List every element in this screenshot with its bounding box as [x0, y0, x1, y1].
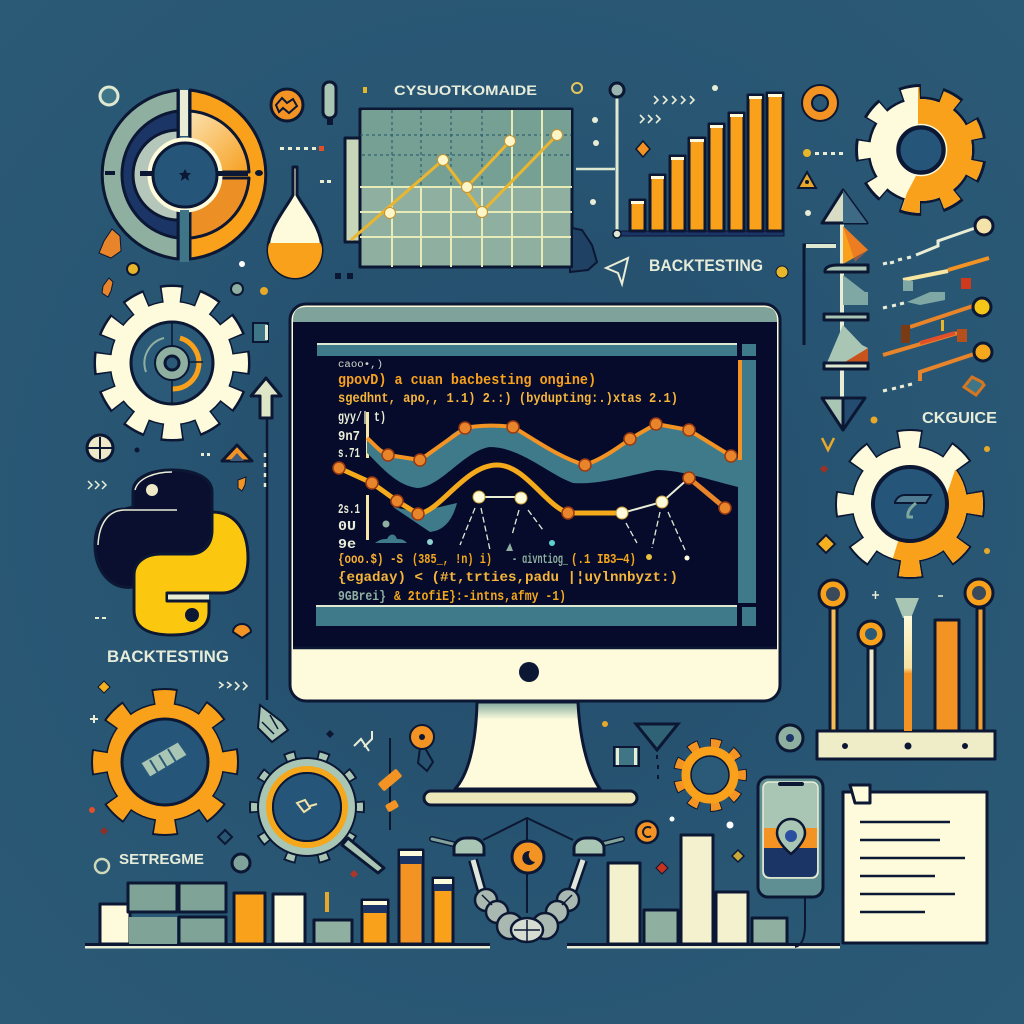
- icon: vertical double arrow: [804, 190, 868, 430]
- chart line: [351, 130, 562, 240]
- python yellow half: [134, 512, 248, 635]
- code text bottom: {ooo.$) -S: [338, 552, 403, 568]
- icon: phone: [758, 777, 823, 947]
- code text bottom: (385_, !n) i): [412, 552, 492, 568]
- power button: [519, 662, 539, 682]
- panel: line chart grid: [345, 109, 572, 267]
- icon: gear right: [846, 440, 974, 568]
- icon: document: [843, 785, 987, 943]
- code text bottom: [338, 552, 678, 605]
- icon: chevron: [222, 445, 252, 461]
- icon: small rectangle: [614, 747, 639, 766]
- icon: small orange cap: [233, 624, 251, 638]
- icon: orange diamond ring: [964, 377, 984, 395]
- small flame icons: [99, 229, 121, 297]
- icon: square outline: [253, 323, 268, 342]
- icon: pliers / clip: [258, 705, 288, 742]
- dots top right: [590, 85, 843, 216]
- small arrows: [640, 96, 694, 123]
- small coin: [776, 266, 788, 278]
- small marks: [95, 448, 246, 619]
- code text bottom: (.1 ІВ3—4): [571, 552, 636, 568]
- code text bottom: {egaday) < (#t,trties,padu |¦uylnnbyzt:): [338, 570, 678, 586]
- icon: pencil marks: [354, 731, 402, 830]
- icon: segmented ring: [102, 90, 266, 262]
- code text bottom: 9GBrei}: [338, 589, 386, 605]
- small arrows: [88, 481, 106, 489]
- icon: orange ring: [807, 90, 833, 116]
- icon: python logo: [95, 470, 248, 635]
- icon: dark puzzle piece: [570, 228, 597, 272]
- icon: liquid drop: [268, 167, 322, 278]
- line chart upper: [367, 418, 737, 471]
- label: ckguice: CKGUICE: [922, 410, 997, 427]
- bar chart: top right: [576, 83, 784, 238]
- small diamond: [817, 446, 990, 554]
- icon: orange pulley: [410, 725, 434, 771]
- bar chart: bottom center: [567, 835, 840, 948]
- connector 1: [883, 217, 993, 264]
- line chart lower: [333, 462, 731, 560]
- area band: [367, 424, 738, 488]
- icon: up arrow with line: [251, 378, 281, 700]
- small marks by title: [363, 83, 582, 93]
- monitor stand: [424, 702, 637, 805]
- small decorations: [98, 681, 247, 693]
- code text bottom: & 2tofiE}:-intns,afmy -1): [394, 589, 566, 605]
- icon: yellow triangle: [798, 172, 816, 188]
- gear orange half: [902, 87, 983, 213]
- icon: orange c coin: [636, 821, 658, 843]
- icon: gear orange lower left: [101, 698, 229, 826]
- icon: target small: [232, 854, 250, 872]
- dots near arrow: [822, 416, 878, 450]
- icon: funnel triangle: [636, 724, 678, 779]
- label: backtesting top: BACKTESTING: [649, 256, 763, 275]
- code text top: gpovD) a cuan bacbesting ongine): [338, 372, 596, 389]
- dots and diamonds: [656, 816, 744, 874]
- icon: small gear center: [679, 744, 741, 806]
- code text top: 0U: [338, 519, 356, 535]
- gear orange segment: [892, 470, 983, 577]
- code text top: 9n7: [338, 429, 360, 445]
- icon: small round: [777, 725, 803, 751]
- icon: orange diamond: [636, 141, 650, 157]
- label: setregme: SETREGME: [119, 851, 204, 868]
- bar chart: bottom left: [85, 850, 490, 948]
- python blue half: [95, 470, 212, 587]
- label: backtesting left: BACKTESTING: [107, 647, 229, 666]
- icon: round target top left: [100, 87, 118, 105]
- code text top: gyy/| t): [338, 410, 386, 426]
- connector 3: [883, 298, 991, 355]
- icon: robot arm with pendant: [432, 818, 622, 942]
- label: top chart title: CYSUOTKOMAIDE: [394, 82, 537, 98]
- icon: gear left: [104, 295, 240, 431]
- screen: [293, 322, 777, 648]
- small dots: [127, 261, 353, 295]
- code text bottom: - ɑivntiog_: [512, 552, 568, 568]
- panel: monitor: [290, 304, 780, 805]
- code text top: 2s.1: [338, 502, 360, 518]
- icon: cursor arrow: [606, 258, 628, 284]
- small decorations: [89, 715, 608, 912]
- icon: ring: [95, 859, 109, 873]
- code text top: s.71: [338, 446, 360, 462]
- icon: magnifier gear: [255, 755, 384, 873]
- icon: small round glyph: [87, 435, 113, 461]
- dotted connector: [280, 146, 331, 183]
- icon: orange coin: [271, 89, 303, 121]
- icon: connector lines right: [883, 217, 993, 391]
- panel: rods and bars right: [817, 579, 995, 759]
- icon: gear top right: [865, 94, 977, 206]
- code text top: caoo•,): [338, 359, 383, 371]
- code text top: sgedhnt, apo,, 1.1) 2.:) (bydupting:.)xtas 2.1): [338, 391, 678, 407]
- icon: capsule: [323, 82, 336, 125]
- connector 4: [883, 343, 992, 391]
- code text top: 9e: [338, 537, 356, 553]
- connector 2: [883, 258, 989, 308]
- code text top: [338, 359, 678, 553]
